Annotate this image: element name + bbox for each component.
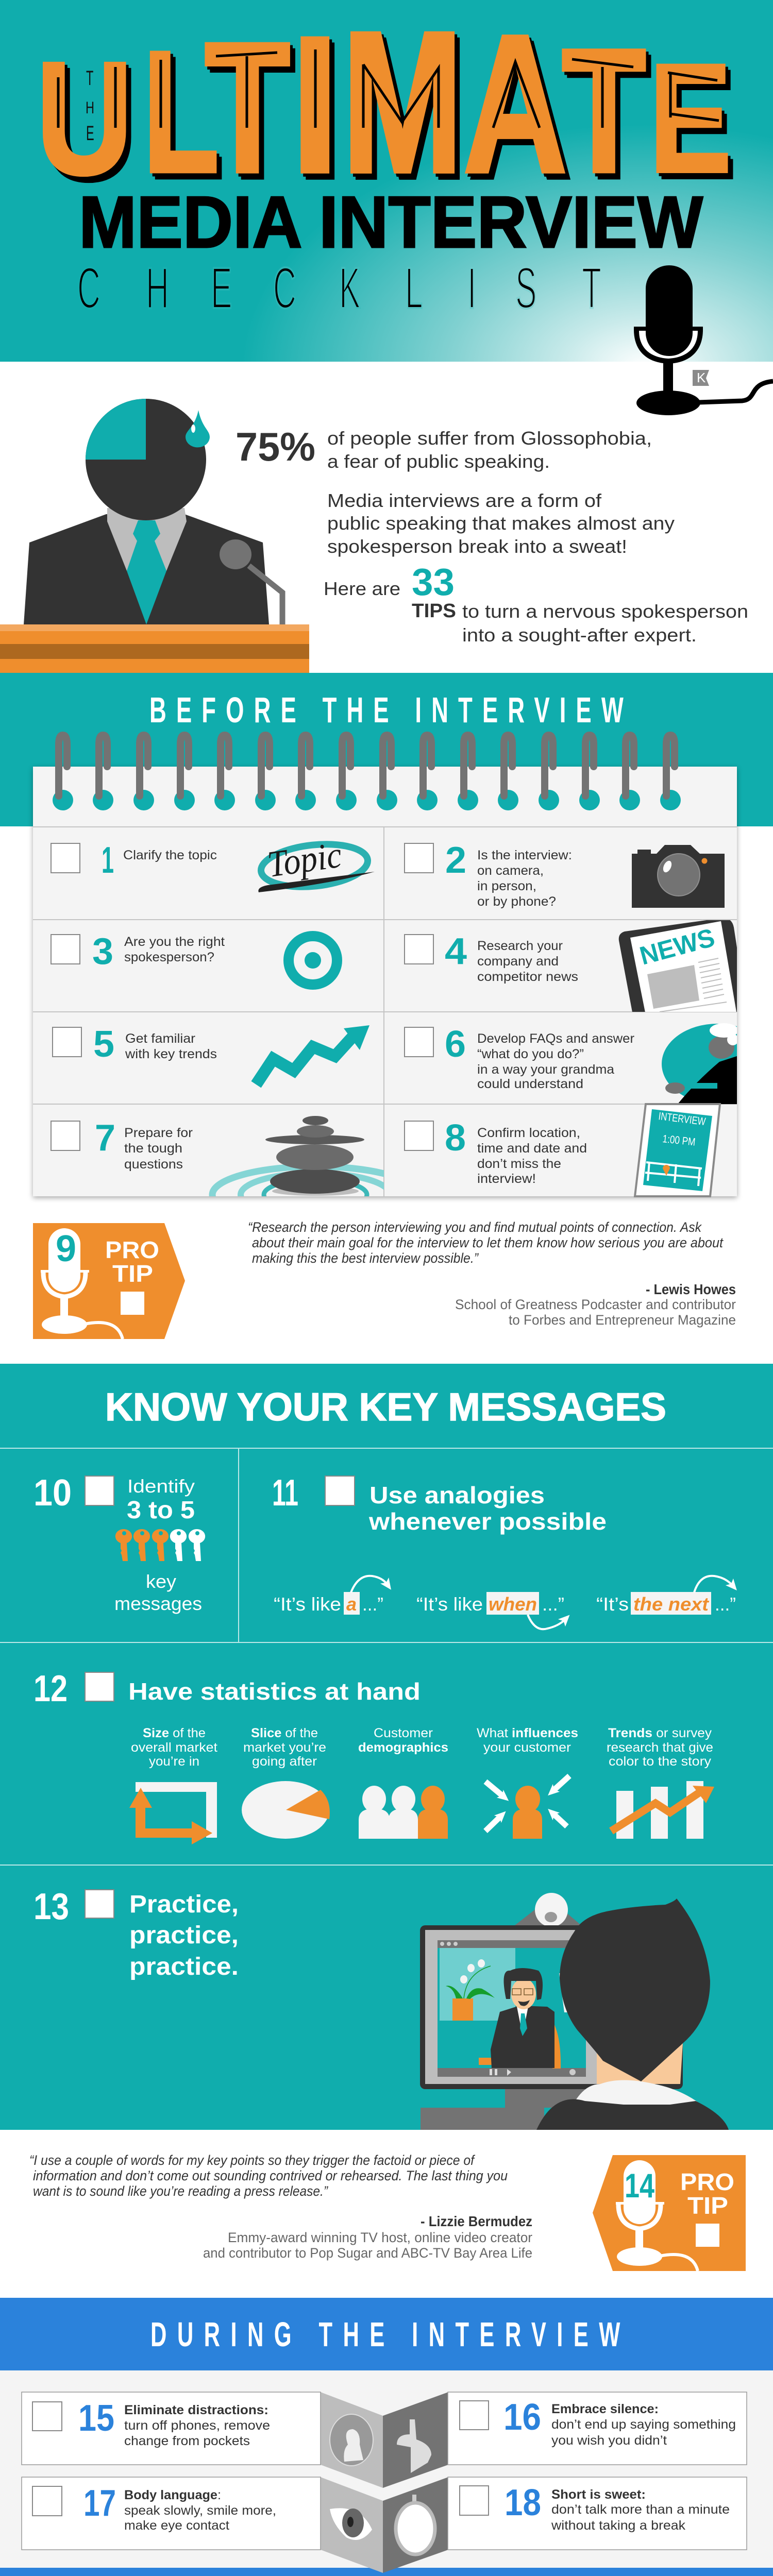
fold icons column (321, 2392, 448, 2573)
tip 10: identify key messages: Identify (127, 1476, 195, 1497)
panel: during tips cards (0, 2370, 773, 2576)
icon: coin (330, 2414, 373, 2466)
tip 3: right spokesperson: spokesperson? (124, 950, 214, 964)
pro tip 14 quote: information and don’t come out sounding contrived or rehearsed. The last thing you (33, 2168, 508, 2183)
tip 17: body language: speak slowly, smile more, (124, 2503, 276, 2518)
analogy phrases: ...” (542, 1594, 564, 1615)
icon: news tablet: NEWS (636, 923, 718, 971)
tip 12: statistics: 12 (33, 1668, 68, 1709)
pro tip 9 badge: TIP (112, 1260, 153, 1287)
icon: topic circled (258, 834, 375, 892)
tip 16: embrace silence (448, 2392, 747, 2465)
tip 8: confirm logistics (405, 1104, 720, 1196)
pro tip 14 badge: TIP (687, 2192, 728, 2219)
pro tip 14 quote: - Lizzie Bermudez (421, 2213, 532, 2229)
tip 10: identify key messages: messages (114, 1593, 202, 1614)
tip 6: FAQs: Develop FAQs and answer (477, 1031, 634, 1046)
tip 17: body language: Body language: (124, 2488, 221, 2502)
icon: trend arrow (256, 1025, 369, 1084)
panel: header (0, 0, 773, 362)
tip 4: research news: competitor news (477, 970, 578, 984)
statistic labels: Trends or survey (608, 1726, 712, 1740)
tip 8: confirm logistics: Confirm location, (477, 1126, 580, 1140)
tip 11: use analogies: Use analogies (369, 1482, 545, 1509)
pro tip 14 quote: Emmy-award winning TV host, online video creator (228, 2230, 532, 2245)
tip 7: tough questions: the tough (124, 1141, 182, 1156)
arrows (351, 1576, 733, 1629)
icon: five keys (115, 1529, 205, 1561)
title: ULTIMATE: A (463, 0, 567, 213)
title: ULTIMATE: U (36, 29, 133, 208)
icon: grandma (662, 1023, 737, 1104)
tip 2: type of interview (405, 840, 725, 909)
tip 13: practice: 13 (33, 1886, 69, 1927)
icon: phone calendar (635, 1104, 720, 1196)
quote: Lewis Howes: - Lewis Howes (646, 1281, 736, 1297)
icon: K logo: K (697, 370, 706, 385)
tip 11: use analogies: whenever possible (368, 1508, 607, 1535)
pro tip 9 badge: PRO (105, 1236, 159, 1263)
title: CHECKLIST: E (211, 256, 232, 321)
icon: stopwatch (396, 2495, 435, 2554)
heading band: before the interview (0, 673, 773, 826)
pro tip 9 badge: 9 (56, 1228, 76, 1269)
tip 5: key trends: with key trends (125, 1047, 217, 1061)
pro tip 9 badge (33, 1223, 185, 1339)
tip 12: statistics: Have statistics at hand (128, 1678, 421, 1705)
tip 8: confirm logistics: 8 (445, 1117, 466, 1159)
tip 6: FAQs: 6 (445, 1024, 466, 1065)
icon: customer demographics (359, 1786, 448, 1839)
statistic labels: going after (252, 1754, 317, 1769)
tip 1: clarify the topic (51, 834, 375, 892)
tip 4: research news: company and (477, 954, 559, 969)
title: CHECKLIST: I (467, 256, 476, 321)
analogy phrases: “It’s like (416, 1594, 483, 1615)
title: ULTIMATE: I (291, 0, 339, 213)
tip 5: key trends (53, 1024, 369, 1084)
icon: news tablet (618, 920, 737, 1012)
tip 11: use analogies (272, 1472, 736, 1629)
title: CHECKLIST: H (146, 256, 169, 321)
pro tip 14 quote: “I use a couple of words for my key points so they trigger the factoid or piece of (29, 2153, 475, 2168)
title: THE: H (86, 98, 94, 117)
statistic labels: your customer (483, 1740, 571, 1755)
intro text: TIPS (412, 600, 456, 622)
tip 2: type of interview: Is the interview: (477, 848, 572, 862)
analogy phrases: the next (633, 1594, 710, 1615)
tip 3: right spokesperson: 3 (92, 931, 113, 972)
icon: K logo (693, 370, 709, 386)
tip 7: tough questions: questions (124, 1157, 183, 1172)
title: CHECKLIST: K (339, 256, 360, 321)
tip 15: eliminate distractions: 15 (78, 2398, 114, 2439)
statistic labels: Size of the (143, 1726, 206, 1740)
intro text: of people suffer from Glossophobia, (327, 428, 652, 449)
tip 5: key trends: 5 (93, 1024, 114, 1065)
heading: know your key messages: KNOW YOUR KEY MESSAGES (105, 1385, 666, 1429)
title: CHECKLIST: T (582, 256, 601, 321)
icon: studio microphone (634, 265, 773, 415)
analogy phrases: ...” (362, 1594, 383, 1615)
tip 2: type of interview: on camera, (477, 863, 544, 878)
intro text: into a sought-after expert. (462, 624, 697, 646)
icon: topic circled: Topic (265, 834, 344, 885)
tip 15: eliminate distractions: turn off phones, remove (124, 2418, 270, 2433)
illustration: nervous spokesperson at podium (0, 399, 309, 673)
analogy phrases: “It’s like (274, 1594, 341, 1615)
intro text: spokesperson break into a sweat! (327, 536, 627, 557)
illustration: video call practice (420, 1893, 729, 2130)
tip 15: eliminate distractions: Eliminate distractions: (124, 2403, 268, 2417)
panel: know your key messages (0, 1364, 773, 2130)
icon: trends chart (611, 1781, 714, 1839)
statistic labels: market you’re (243, 1740, 326, 1755)
tip 6: FAQs: “what do you do?” (477, 1047, 584, 1061)
tip 8: confirm logistics: time and date and (477, 1141, 587, 1156)
notebook spiral rings (53, 735, 681, 810)
tip 13: practice: Practice, (129, 1891, 239, 1918)
title: ULTIMATE (36, 0, 731, 215)
title: ULTIMATE: E (649, 32, 731, 205)
tip 12: statistics (33, 1668, 714, 1844)
tip 10: identify key messages: 10 (33, 1472, 72, 1514)
tip 8: confirm logistics: don’t miss the (477, 1157, 561, 1171)
tip 18: short is sweet (448, 2477, 747, 2550)
intro text: public speaking that makes almost any (327, 513, 675, 534)
quote: Lewis Howes: “Research the person interviewing you and find mutual points of connection. Ask (248, 1219, 702, 1235)
title: ULTIMATE: T (562, 13, 646, 209)
quote: Lewis Howes: School of Greatness Podcaster and contributor (455, 1297, 736, 1312)
pro tip 14 quote: and contributor to Pop Sugar and ABC-TV Bay Area Life (203, 2245, 532, 2261)
analogy phrases (274, 1592, 736, 1615)
tip 10: identify key messages: 3 to 5 (127, 1497, 195, 1524)
icon: camera (632, 845, 725, 908)
tip 13: practice (33, 1886, 729, 2130)
title: MEDIA INTERVIEW: MEDIA INTERVIEW (79, 181, 703, 263)
icon: balanced stones (209, 1116, 384, 1196)
tip 16: embrace silence: don’t end up saying something (551, 2417, 736, 2432)
icon: finger on lips silence (397, 2419, 431, 2473)
statistic labels: What influences (477, 1726, 578, 1740)
analogy phrases: when (489, 1594, 537, 1615)
statistic: 75%: 75% (236, 424, 315, 469)
tip 13: practice: practice. (129, 1953, 239, 1980)
title: CHECKLIST (77, 256, 601, 321)
title: ULTIMATE: L (143, 15, 219, 209)
pro tip 14 badge: PRO (680, 2168, 734, 2195)
tip 2: type of interview: in person, (477, 879, 536, 893)
tip 16: embrace silence: Embrace silence: (551, 2402, 659, 2416)
tip 17: body language (22, 2477, 321, 2550)
tip 13: practice: practice, (129, 1922, 239, 1949)
tip 7: tough questions: Prepare for (124, 1126, 193, 1140)
tip 18: short is sweet: Short is sweet: (551, 2487, 646, 2502)
tip 3: right spokesperson (51, 931, 337, 985)
title: THE: T (86, 66, 93, 90)
statistic labels: overall market (131, 1740, 217, 1755)
statistic labels (131, 1726, 713, 1769)
title: CHECKLIST: C (77, 256, 100, 321)
icon: market size (129, 1782, 217, 1844)
tip 10: identify key messages: key (146, 1571, 176, 1592)
analogy phrases: a (346, 1594, 357, 1615)
analogy phrases: “It’s (596, 1594, 629, 1615)
tip 7: tough questions (51, 1116, 384, 1196)
quote: Lewis Howes: about their main goal for the interview to let them know how serious you are about (252, 1235, 724, 1250)
panel: notebook checklist (33, 735, 773, 1223)
tip 7: tough questions: 7 (95, 1117, 115, 1159)
tip 4: research news: Research your (477, 939, 563, 953)
tip 8: confirm logistics: interview! (477, 1172, 536, 1186)
tip 4: research news: 4 (445, 931, 467, 972)
statistic labels: you’re in (149, 1754, 199, 1769)
title: THE (86, 66, 94, 145)
statistic labels: color to the story (609, 1754, 712, 1769)
tip 16: embrace silence: 16 (503, 2397, 541, 2438)
heading band: during the interview (0, 2298, 773, 2370)
tip 16: embrace silence: you wish you didn’t (551, 2433, 667, 2448)
title: CHECKLIST: C (273, 256, 296, 321)
tip 6: FAQs (405, 1023, 773, 1104)
tip 15: eliminate distractions (22, 2392, 321, 2465)
intro text: to turn a nervous spokesperson (462, 601, 748, 622)
tip 17: body language: make eye contact (124, 2518, 229, 2533)
tip 15: eliminate distractions: change from pockets (124, 2434, 250, 2448)
tip 2: type of interview: 2 (445, 840, 466, 881)
quote: Lewis Howes: to Forbes and Entrepreneur Magazine (509, 1312, 736, 1328)
heading band: during the interview: DURING THE INTERVIEW (150, 2315, 620, 2353)
icon: phone calendar: INTERVIEW (658, 1110, 707, 1128)
statistic labels: research that give (607, 1740, 713, 1755)
quote: Lewis Howes: making this the best interview possible.” (252, 1250, 479, 1266)
intro text: a fear of public speaking. (327, 451, 550, 472)
statistic labels: Slice of the (251, 1726, 318, 1740)
panel: introduction (0, 399, 748, 673)
icon: phone calendar: 1:00 PM (662, 1133, 696, 1148)
tip 2: type of interview: or by phone? (477, 894, 556, 909)
tip 5: key trends: Get familiar (125, 1031, 195, 1046)
tip 11: use analogies: 11 (272, 1472, 298, 1514)
intro text (324, 428, 748, 646)
intro text: Here are (324, 578, 400, 599)
pro tip 14 badge (593, 2155, 746, 2271)
tip 18: short is sweet: 18 (505, 2482, 541, 2523)
tip 6: FAQs: could understand (477, 1077, 583, 1091)
intro text: 33 (412, 561, 455, 603)
tip 10: identify key messages (33, 1472, 205, 1614)
tip 17: body language: 17 (83, 2483, 116, 2524)
tip 1: clarify the topic: Clarify the topic (123, 848, 217, 862)
tip 4: research news (405, 918, 747, 1015)
icon: target (289, 936, 337, 985)
tip 1: clarify the topic: 1 (102, 840, 114, 881)
tip 18: short is sweet: don’t talk more than a minute (551, 2502, 730, 2517)
title: CHECKLIST: L (405, 256, 423, 321)
title: CHECKLIST: S (515, 256, 536, 321)
intro text: Media interviews are a form of (327, 490, 602, 511)
pro tip 14 quote: want is to sound like you’re reading a press release.” (33, 2183, 328, 2199)
heading band: before the interview: BEFORE THE INTERVIEW (149, 690, 624, 730)
icon: eye (330, 2508, 372, 2540)
tip 3: right spokesperson: Are you the right (124, 935, 225, 949)
quote: Lewis Howes (248, 1219, 736, 1328)
title: ULTIMATE: T (205, 4, 290, 211)
icon: customer influences (485, 1776, 569, 1839)
tip 6: FAQs: in a way your grandma (477, 1062, 614, 1077)
pro tip 14 quote (29, 2153, 532, 2261)
statistic labels: demographics (358, 1740, 448, 1755)
title: THE: E (86, 121, 94, 145)
pro tip 14 badge: 14 (625, 2166, 654, 2205)
icon: market slice pie (242, 1781, 330, 1839)
statistic labels: Customer (374, 1726, 433, 1740)
tip 18: short is sweet: without taking a break (551, 2518, 686, 2533)
analogy phrases: ...” (715, 1594, 736, 1615)
